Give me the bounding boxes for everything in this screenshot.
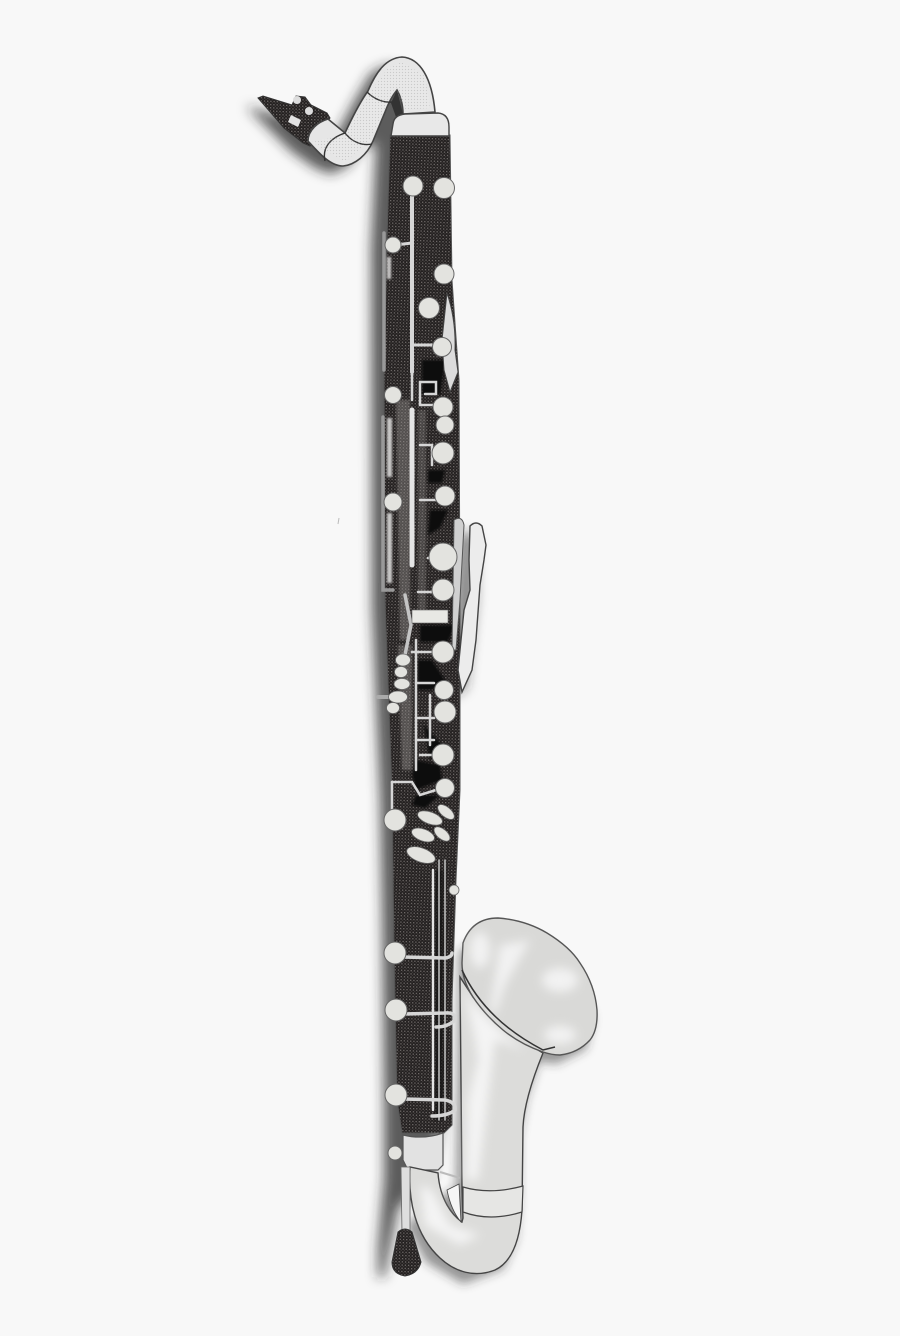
solid dark zones xyxy=(412,360,455,1120)
stray mark xyxy=(338,518,339,524)
bell tube xyxy=(410,977,543,1274)
rods and linkages xyxy=(378,190,455,1120)
drop shadow xyxy=(246,65,476,1278)
bell mouth xyxy=(462,918,597,1055)
body tube xyxy=(384,135,460,1133)
ligature highlights xyxy=(293,96,301,104)
left-hand oval touch keys xyxy=(386,654,410,714)
neck xyxy=(308,57,435,166)
gap between joint and bell xyxy=(447,1184,461,1222)
tube band xyxy=(463,1186,523,1217)
right-hand pinky keys xyxy=(405,802,459,895)
round keys xyxy=(384,176,457,1160)
bell shadow xyxy=(406,927,593,1284)
top ferrule xyxy=(391,113,449,136)
end rod and thumb tip xyxy=(392,1167,421,1276)
bottom cap xyxy=(403,1133,443,1170)
side spatula key xyxy=(442,293,486,692)
lighter mechanism region xyxy=(396,400,412,770)
tube highlights xyxy=(420,990,525,1245)
key-guard gaps on the left side xyxy=(387,257,392,583)
rectangular key plate xyxy=(412,610,448,623)
mouthpiece xyxy=(258,96,330,146)
